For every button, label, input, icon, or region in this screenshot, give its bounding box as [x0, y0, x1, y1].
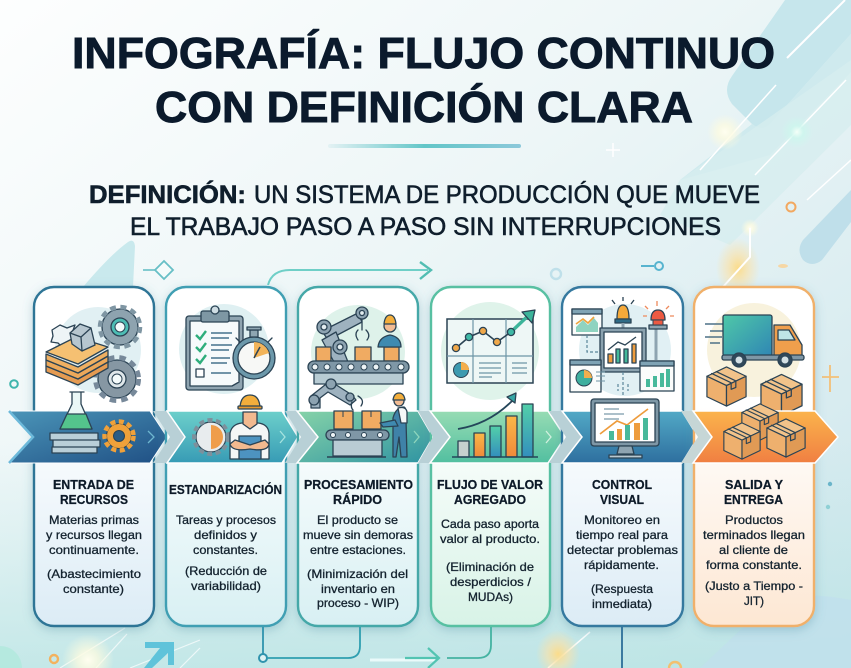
panel: procesamiento rápido — [285, 287, 433, 626]
panel: flujo de valor agregado — [418, 287, 565, 626]
icon: lower conveyor and worker — [326, 393, 419, 457]
card text 6: al cliente de — [719, 543, 788, 557]
card text 3: El producto se — [317, 513, 398, 527]
card text 6: SALIDA Y — [725, 478, 784, 492]
card text 5: tiempo real para — [576, 528, 668, 542]
definition subtitle: UN SISTEMA DE PRODUCCIÓN QUE MUEVE — [254, 180, 760, 209]
card text 6: terminados llegan — [703, 528, 805, 542]
card text 4: MUDAs) — [468, 590, 513, 604]
panel: control visual — [549, 287, 698, 626]
card frame 6 — [694, 287, 814, 626]
ribbon 1 — [9, 411, 167, 463]
decorative connectors top — [10, 202, 839, 509]
card text 2: Tareas y procesos — [176, 513, 276, 527]
card text 1: continuamente. — [49, 543, 139, 557]
title: INFOGRAFÍA: FLUJO CONTINUO — [72, 28, 775, 78]
card text 6: JIT) — [744, 594, 764, 608]
icon: box top right — [761, 374, 802, 416]
card text 4: (Eliminación de — [446, 560, 534, 574]
icon: desktop monitor with chart — [591, 399, 659, 458]
bottom connectors — [50, 627, 681, 668]
ribbon gap 5-6 — [681, 411, 712, 463]
card text 1: (Abastecimiento — [47, 567, 141, 581]
card text 6: ENTREGA — [724, 493, 783, 507]
ribbon 6 — [693, 411, 838, 463]
card frame 2 — [166, 287, 286, 626]
definition subtitle — [89, 179, 760, 241]
icon: dashboard chart — [441, 302, 539, 400]
card text 3: (Minimización del — [307, 567, 408, 581]
card text 4: FLUJO DE VALOR — [437, 478, 543, 492]
card text 5: CONTROL — [592, 478, 652, 492]
arrow: bottom blue arrow — [144, 642, 174, 668]
definition subtitle: DEFINICIÓN: — [89, 179, 246, 209]
icon: flask, books and orange gear — [50, 392, 154, 453]
ribbon 4 — [430, 411, 565, 463]
card text 2: definidos y — [194, 528, 257, 542]
card text 6: forma constante. — [706, 558, 802, 572]
icon: stacked boxes — [724, 404, 805, 459]
card text 3: RÁPIDO — [333, 492, 382, 507]
card text 5: VISUAL — [600, 493, 644, 507]
ribbon 5 — [562, 411, 698, 463]
card frame 1 — [34, 287, 154, 626]
card frame 3 — [298, 287, 418, 626]
card frame 5 — [562, 287, 683, 626]
card text 1: RECURSOS — [60, 493, 128, 507]
icon: rising bar chart — [452, 393, 551, 457]
card text 2: ESTANDARIZACIÓN — [169, 482, 282, 497]
icon: gears and raw materials — [46, 307, 141, 400]
ribbon 3 — [297, 411, 433, 463]
card text 3: proceso - WIP) — [317, 596, 399, 610]
card text 5: detectar problemas — [567, 543, 678, 557]
card text 3: entre estaciones. — [310, 543, 406, 557]
card text 4: valor al producto. — [440, 532, 540, 546]
card text 1 — [46, 478, 142, 596]
ribbon 2 — [167, 411, 298, 463]
card text 6: (Justo a Tiempo - — [705, 579, 803, 593]
icon: box top left — [707, 367, 746, 406]
icon: worker and gauge gear — [194, 395, 285, 459]
definition subtitle: EL TRABAJO PASO A PASO SIN INTERRUPCIONES — [130, 213, 721, 241]
card text 2: variabilidad) — [191, 579, 261, 593]
title divider — [328, 144, 521, 148]
panel: salida y entrega — [681, 287, 838, 626]
card text 3 — [303, 478, 413, 610]
card text 2: constantes. — [193, 543, 258, 557]
icon: robot arm, conveyor and worker — [308, 305, 409, 411]
card text 2 — [169, 482, 282, 593]
ribbon gap 3-4 — [418, 411, 450, 463]
card frame 4 — [431, 287, 550, 626]
title — [72, 28, 775, 132]
card text 5 — [567, 478, 678, 611]
icon: delivery truck — [705, 303, 804, 397]
card text 1: y recursos llegan — [46, 528, 142, 542]
ribbon gap 1-2 — [153, 411, 185, 463]
card text 5: rápidamente. — [584, 558, 659, 572]
card text 4: desperdicios / — [450, 575, 532, 589]
card text 4 — [437, 478, 543, 604]
icon: clipboard and stopwatch — [179, 304, 275, 394]
card text 5: Monitoreo en — [584, 513, 660, 527]
card text 1: ENTRADA DE — [53, 478, 134, 492]
card text 4: Cada paso aporta — [441, 517, 539, 531]
card text 6: Productos — [725, 513, 783, 527]
card text 2: (Reducción de — [185, 564, 267, 578]
card text 3: mueve sin demoras — [303, 528, 413, 542]
card text 5: (Respuesta — [591, 582, 653, 596]
card text 3: inventario en — [321, 582, 395, 596]
card text 1: constante) — [63, 582, 124, 596]
card text 6 — [703, 478, 805, 608]
panel: entrada de recursos — [9, 287, 167, 626]
ribbon gap 2-3 — [285, 411, 318, 463]
card text 1: Materias primas — [49, 513, 139, 527]
ribbon gap 4-5 — [549, 411, 582, 463]
icon: monitoring panels and alarms — [570, 297, 674, 396]
card text 5: inmediata) — [592, 597, 652, 611]
panel: estandarización — [153, 287, 298, 626]
card text 3: PROCESAMIENTO — [304, 478, 413, 492]
card text 4: AGREGADO — [454, 493, 526, 507]
title: CON DEFINICIÓN CLARA — [155, 82, 693, 132]
